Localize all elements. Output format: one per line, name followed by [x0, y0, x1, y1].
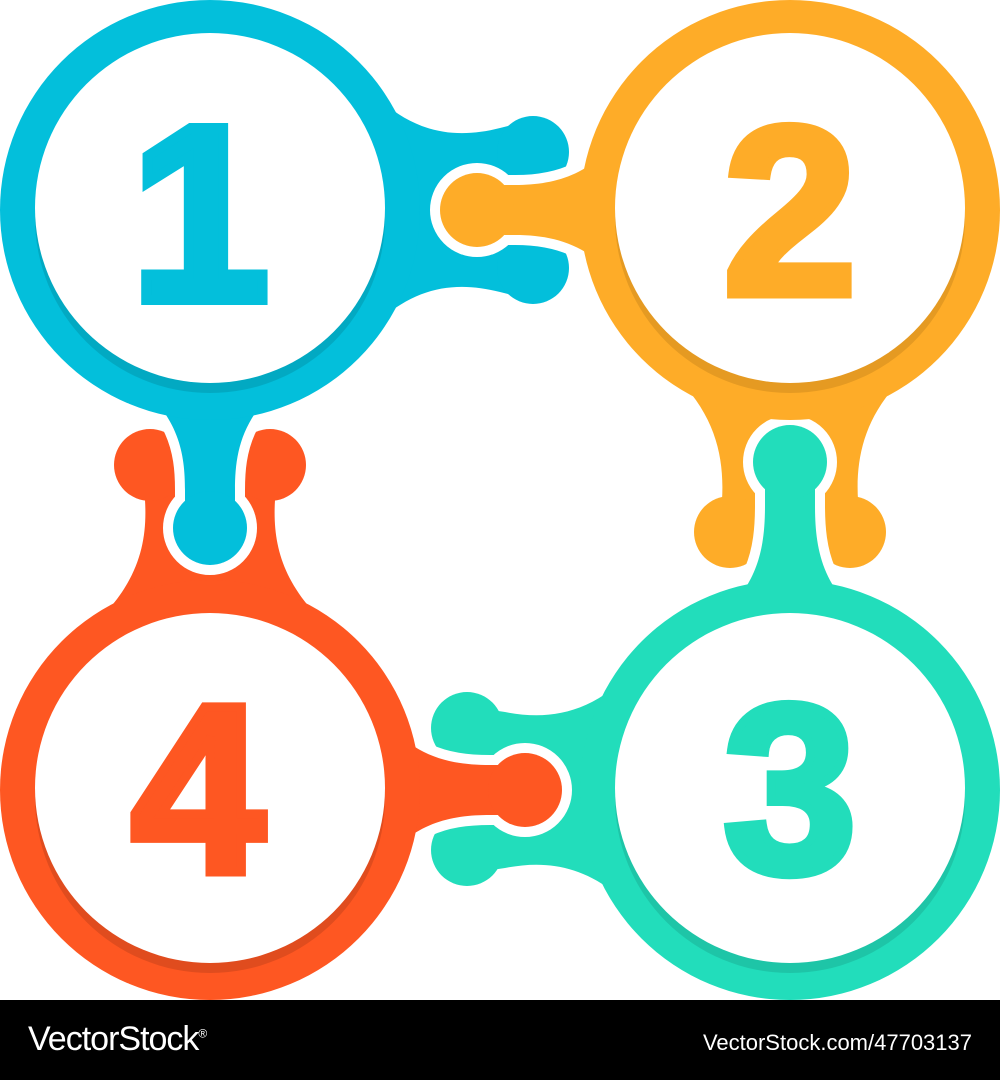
circle 2 [580, 0, 1000, 420]
circle 1: 1 [130, 74, 270, 353]
lobe: blue [120, 370, 300, 565]
footer bar [0, 1000, 1000, 1080]
circle 3 [580, 580, 1000, 1000]
circle 4 [0, 580, 420, 1000]
lobe: orange [440, 120, 630, 300]
connector tabs: red to blue [70, 429, 350, 645]
connector tabs: blue to orange [345, 60, 569, 360]
lobe: teal [700, 425, 880, 630]
footer brand: VectorStock® [28, 1020, 206, 1058]
connector tabs: teal to red [431, 645, 655, 935]
circle 4: 4 [131, 655, 265, 923]
circle 2: 2 [723, 77, 857, 345]
lobe: red [370, 700, 562, 880]
circle 3: 3 [723, 655, 857, 923]
circle 1 [0, 0, 420, 420]
footer url: VectorStock.com/47703137 [703, 1030, 972, 1055]
connector tabs: orange to teal [650, 355, 930, 568]
